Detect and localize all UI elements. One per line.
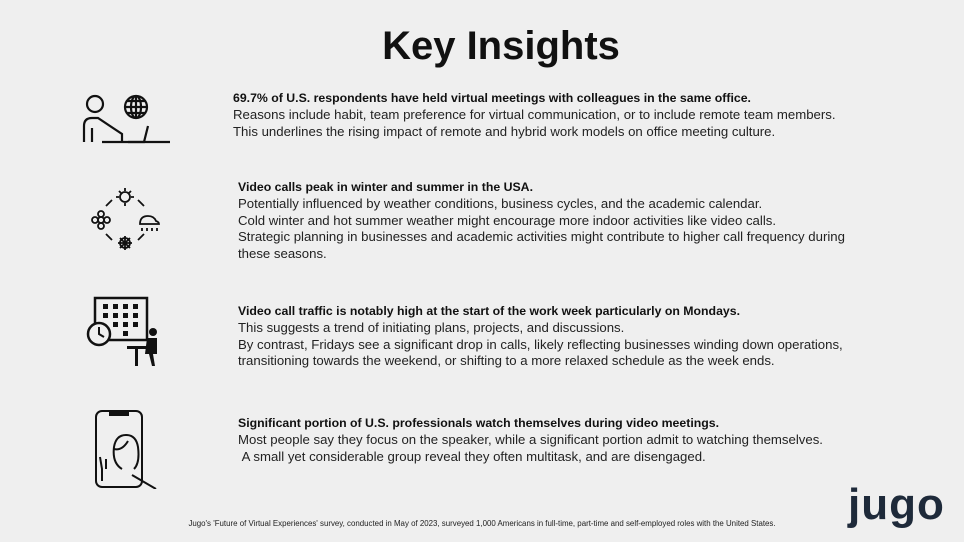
text block 2 — [238, 180, 845, 261]
text block 1 — [233, 91, 836, 139]
text block 4 — [238, 416, 823, 464]
text block 3: transitioning towards the weekend, or shifting to a more relaxed schedule as the week ends. — [238, 353, 775, 368]
icon: phone selfie — [95, 410, 156, 489]
text block 3: This suggests a trend of initiating plans, projects, and discussions. — [238, 320, 624, 335]
text block 2: Potentially influenced by weather conditions, business cycles, and the academic calendar. — [238, 196, 762, 211]
text block 3 — [238, 304, 843, 368]
text block 2: Video calls peak in winter and summer in the USA. — [238, 180, 533, 194]
icon: person with globe and laptop — [82, 94, 170, 144]
text block 4: Most people say they focus on the speaker, while a significant portion admit to watching themselves. — [238, 432, 823, 447]
text block 3: By contrast, Fridays see a significant drop in calls, likely reflecting businesses winding down operations, — [238, 337, 843, 352]
text block 4: Significant portion of U.S. professionals watch themselves during video meetings. — [238, 416, 719, 430]
text block 2: Strategic planning in businesses and academic activities might contribute to higher call frequency during — [238, 229, 845, 244]
text block 1: This underlines the rising impact of remote and hybrid work models on office meeting culture. — [233, 124, 775, 139]
text block 4: A small yet considerable group reveal they often multitask, and are disengaged. — [242, 449, 706, 464]
title: Key Insights — [382, 24, 620, 68]
logo: jugo: jugo — [848, 480, 945, 529]
text block 2: Cold winter and hot summer weather might encourage more indoor activities like video calls. — [238, 213, 776, 228]
icon: calendar clock worker — [86, 296, 157, 366]
footer note: Jugo's 'Future of Virtual Experiences' survey, conducted in May of 2023, surveyed 1,000 Americans in full-time, part-time and self-employed roles with the United States. — [188, 519, 776, 528]
text block 1: Reasons include habit, team preference for virtual communication, or to include remote team members. — [233, 107, 836, 122]
text block 2: these seasons. — [238, 246, 327, 261]
icon: seasons cycle — [91, 188, 160, 250]
text block 1: 69.7% of U.S. respondents have held virtual meetings with colleagues in the same office. — [233, 91, 751, 105]
text block 3: Video call traffic is notably high at the start of the work week particularly on Mondays. — [238, 304, 740, 318]
